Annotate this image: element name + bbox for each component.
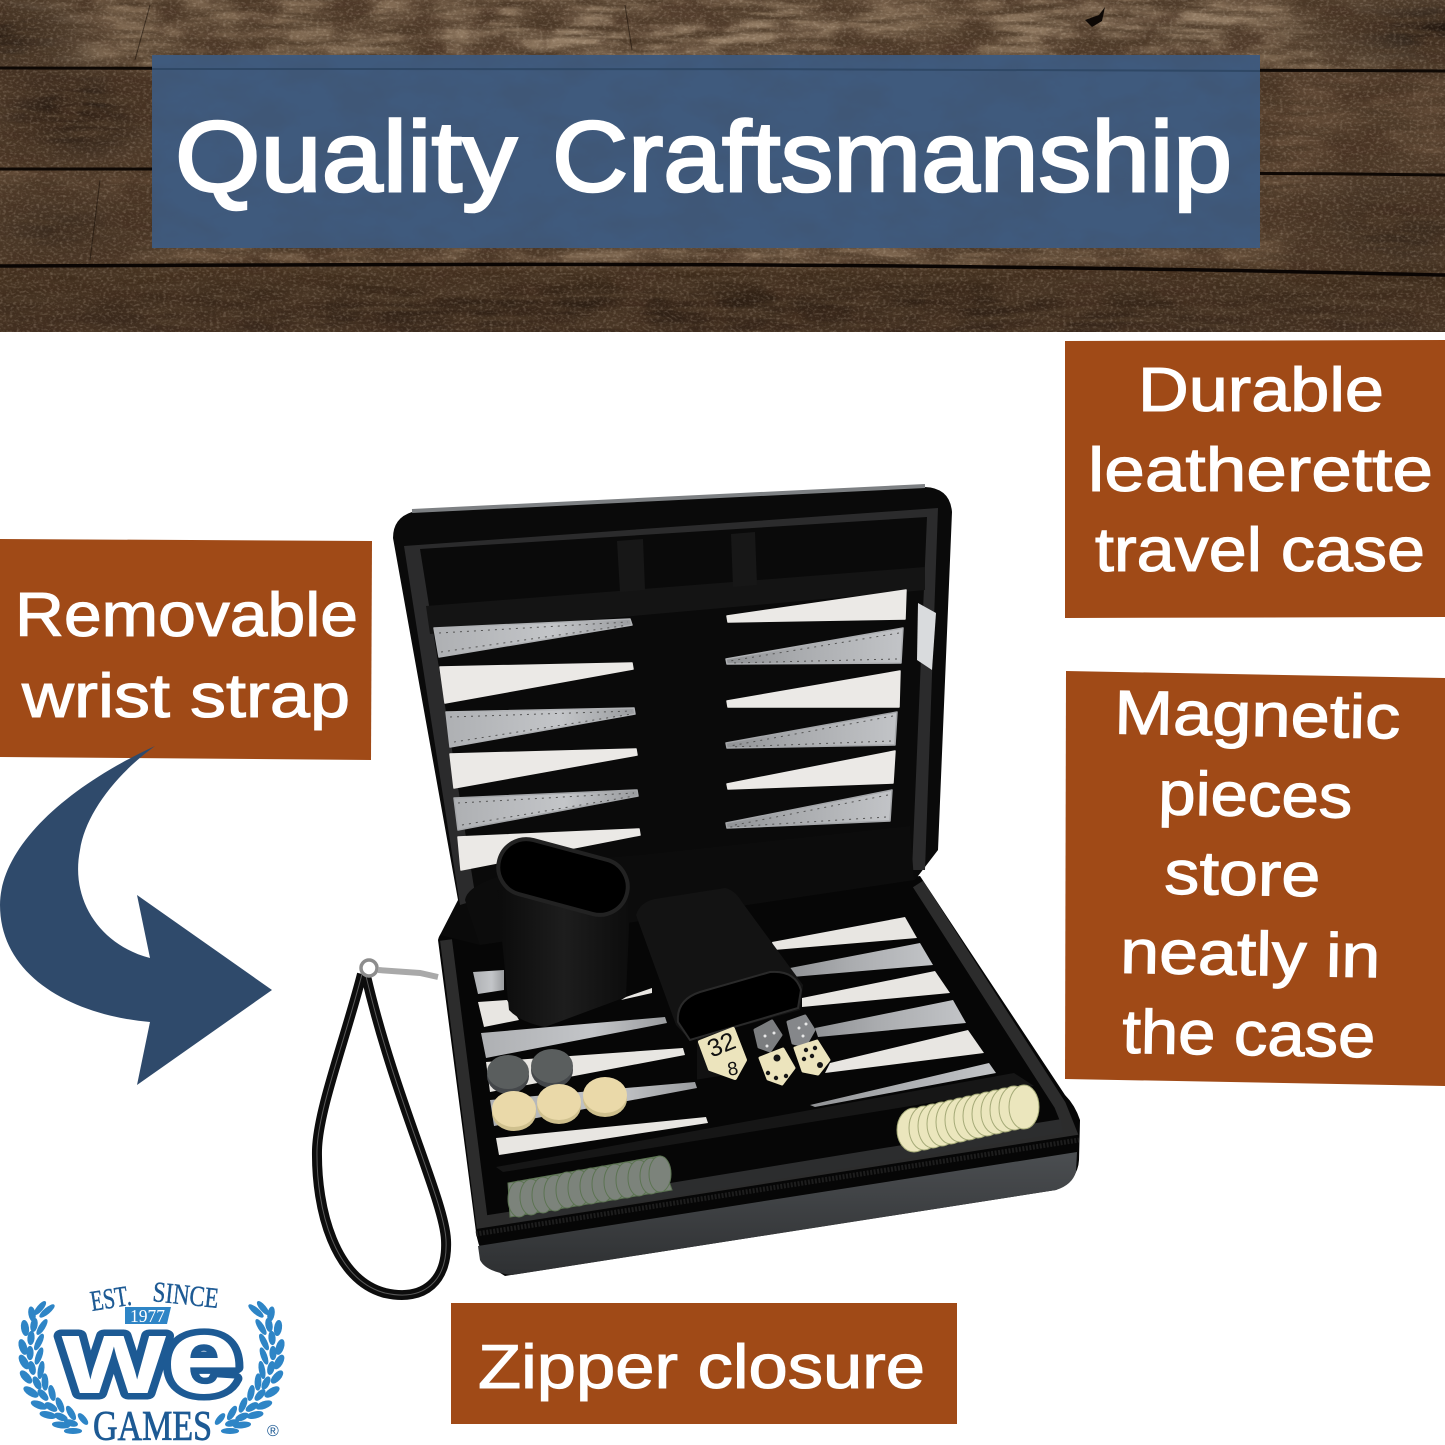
callout: durable leatherette travel case <box>1065 340 1445 618</box>
panel: wood plank header <box>0 0 1445 347</box>
callout: zipper closure: Zipper closure <box>478 1333 925 1402</box>
dice cup lying <box>636 888 803 1040</box>
callout: removable wrist strap: wrist strap <box>21 662 350 731</box>
1977 ribbon: 1977 <box>130 1306 165 1326</box>
title banner <box>152 55 1260 248</box>
grey checker stack <box>508 1156 672 1217</box>
dice cup upright <box>492 833 634 1027</box>
lower case half <box>438 876 1080 1276</box>
registered mark: ® <box>267 1423 279 1440</box>
callout: durable leatherette travel case: travel case <box>1095 516 1425 585</box>
doubling cube <box>700 1027 745 1081</box>
laurel left <box>17 1300 89 1433</box>
est since: EST. <box>88 1280 134 1318</box>
wrist strap <box>317 960 446 1295</box>
doubling cube: 32 <box>703 1027 740 1063</box>
callout: durable leatherette travel case: leatherette <box>1088 436 1433 505</box>
dice group <box>700 1016 829 1084</box>
we wordmark: we <box>61 1295 240 1416</box>
callout: magnetic pieces: store <box>1164 839 1321 910</box>
callout: magnetic pieces: the case <box>1122 998 1376 1071</box>
callout: durable leatherette travel case: Durable <box>1138 356 1384 425</box>
callout: magnetic pieces: neatly in <box>1120 918 1381 991</box>
heading <box>175 101 1232 213</box>
arrow: curved pointer to strap <box>0 746 272 1085</box>
callout: magnetic pieces <box>1065 671 1445 1086</box>
grey and ivory checkers <box>487 1049 627 1131</box>
doubling cube: 8 <box>726 1058 740 1081</box>
upper board points <box>434 590 906 870</box>
heading: Craftsmanship <box>552 101 1232 213</box>
callout: magnetic pieces: pieces <box>1158 759 1353 832</box>
callout: removable wrist strap <box>0 539 372 760</box>
callout: removable wrist strap: Removable <box>15 581 358 650</box>
product: backgammon travel case <box>317 486 1080 1295</box>
est since <box>88 1276 220 1318</box>
callout: magnetic pieces: Magnetic <box>1114 679 1401 752</box>
logo: WE Games <box>17 1276 286 1445</box>
est since: SINCE <box>151 1276 220 1315</box>
heading: Quality <box>175 101 517 213</box>
ivory checker stack <box>897 1085 1039 1152</box>
upper lid <box>393 486 952 945</box>
callout: zipper closure <box>451 1303 957 1424</box>
lower board points <box>473 917 996 1155</box>
laurel right <box>214 1300 286 1433</box>
